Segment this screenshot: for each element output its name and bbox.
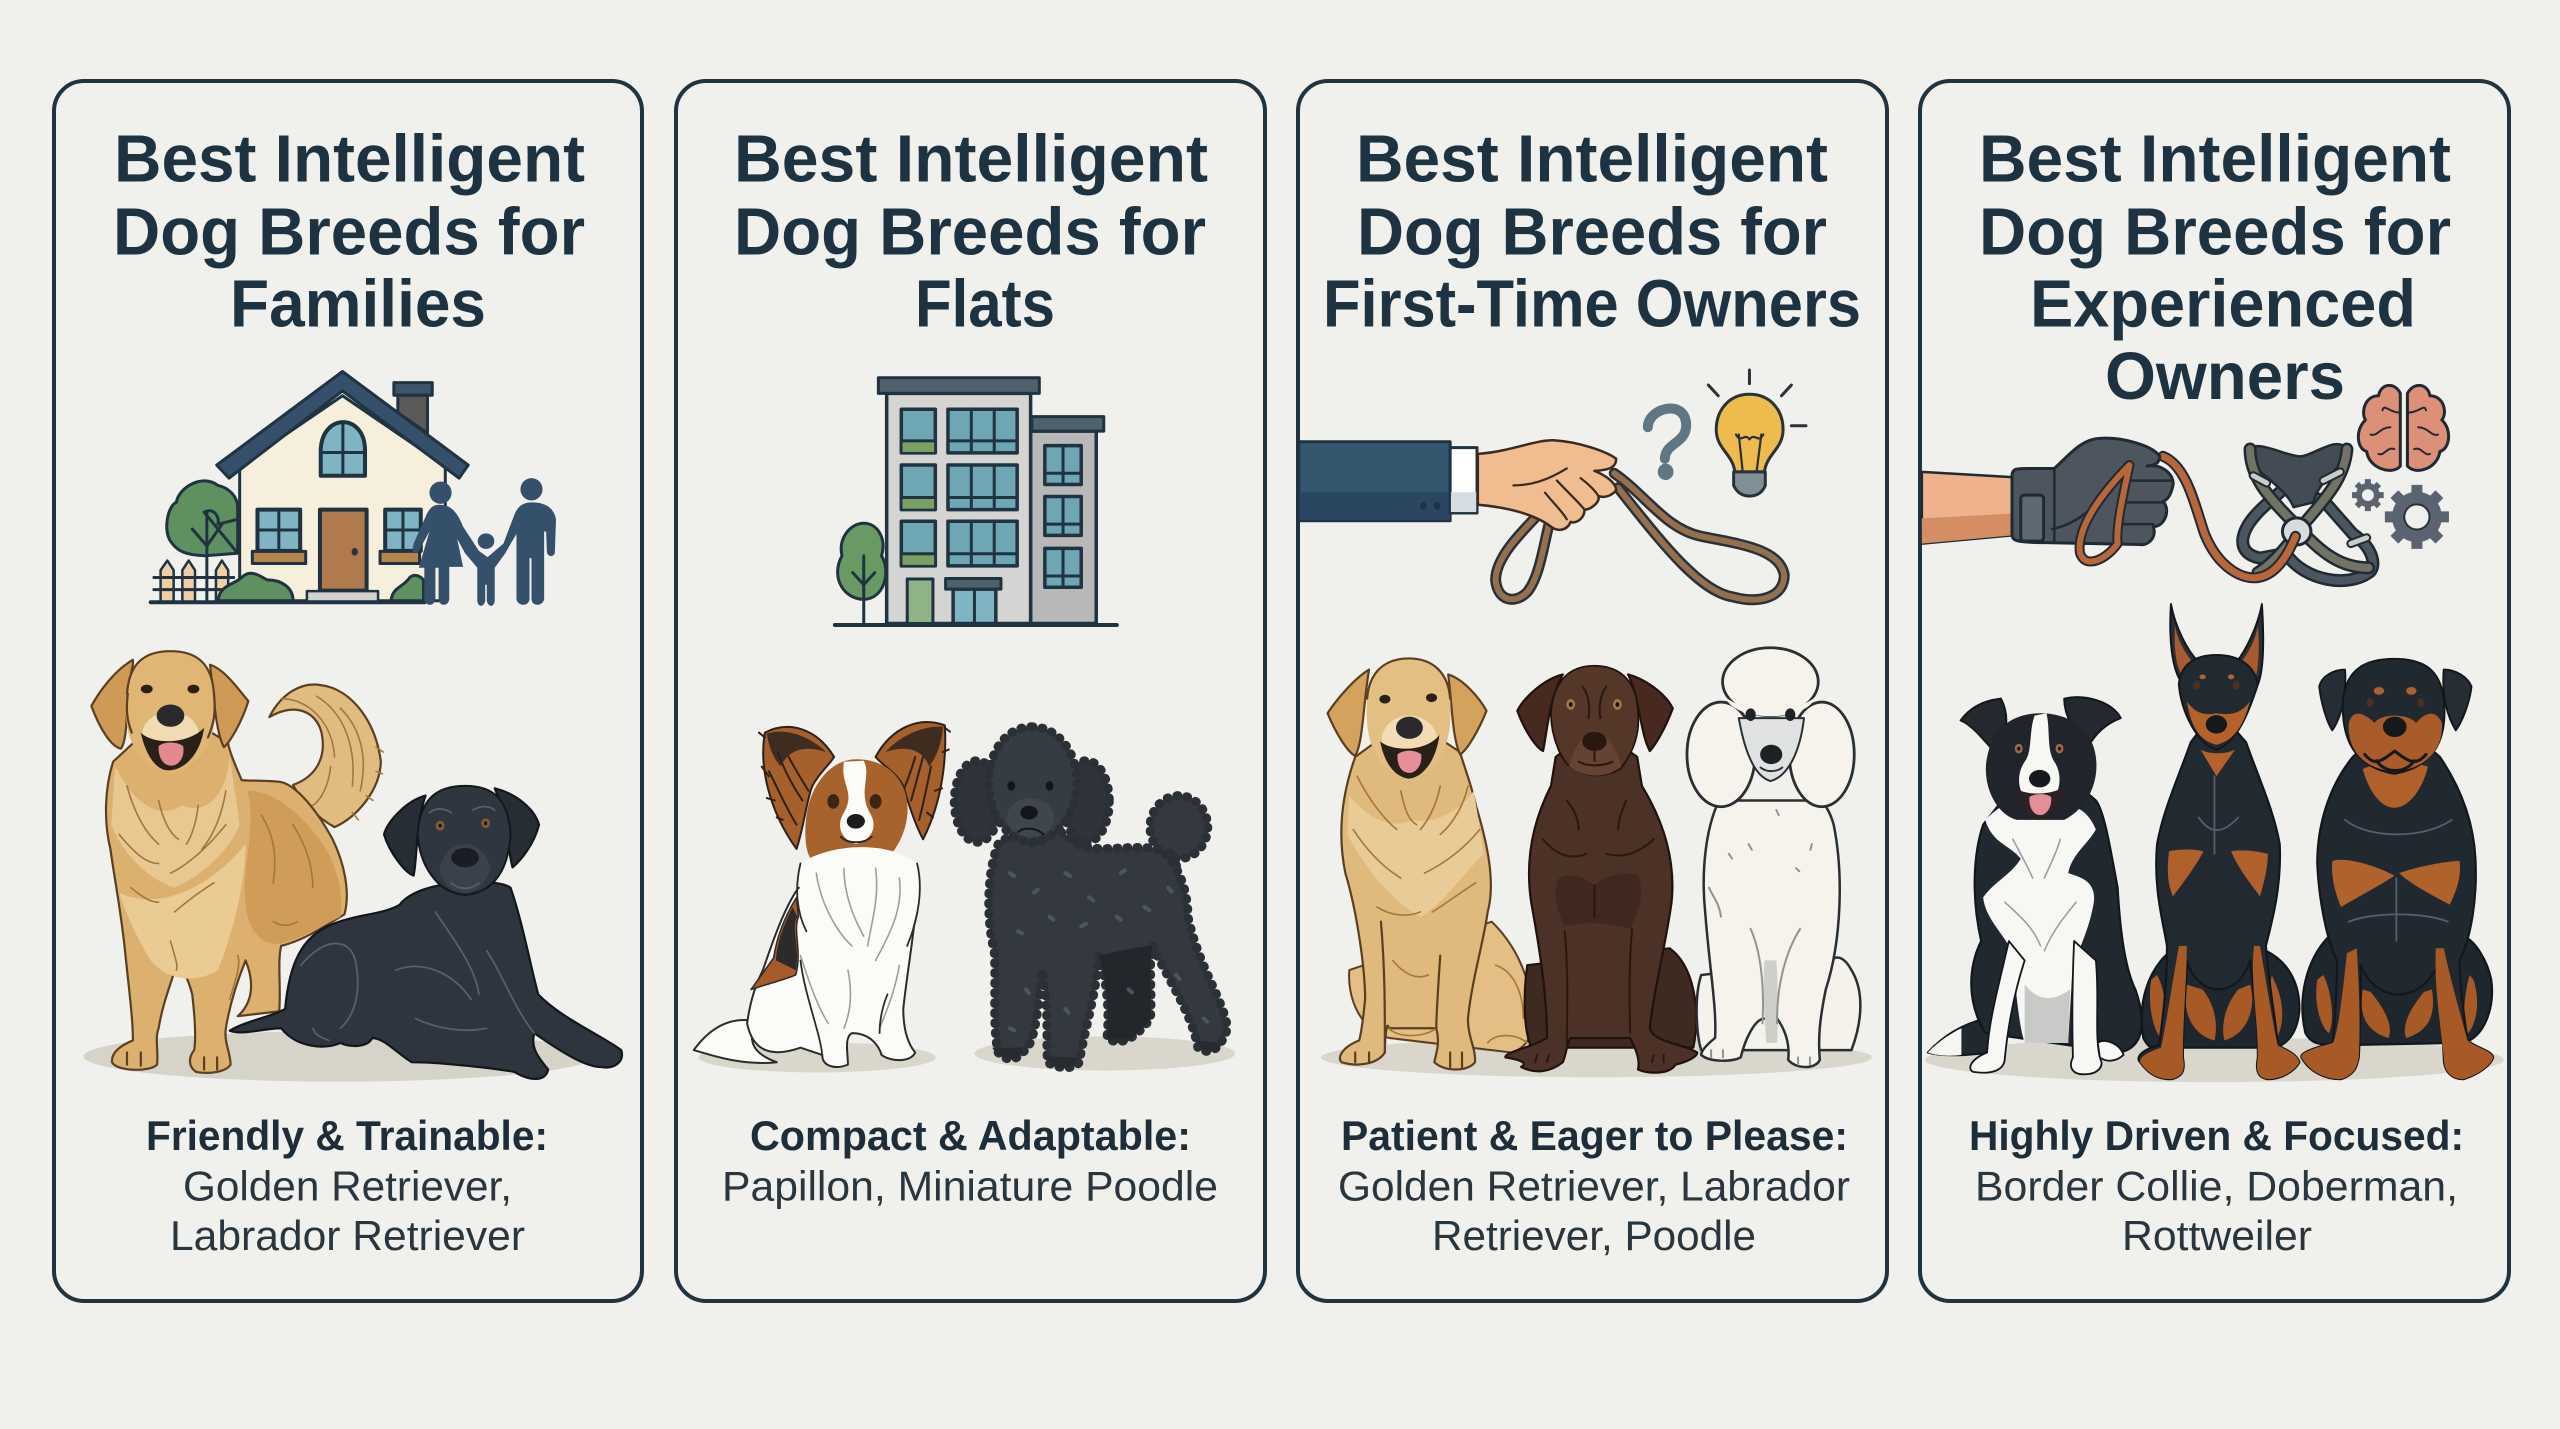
heading: first-time owners: Best Intelligent <box>1356 122 1828 197</box>
ground shadow <box>1321 1037 1872 1077</box>
text: flat breeds <box>722 1112 1218 1210</box>
heading: families: Dog Breeds for <box>113 194 585 269</box>
icon: hand holding leash <box>1299 440 1784 600</box>
dog: papillon <box>694 722 950 1067</box>
text: first-time breeds: Golden Retriever, Labrador <box>1338 1163 1850 1210</box>
heading: families <box>113 122 585 342</box>
card frame <box>676 81 1265 1301</box>
heading: flats <box>734 122 1208 342</box>
panel: experienced owners <box>1920 81 2509 1301</box>
illustration: experienced art <box>1922 385 2504 1082</box>
heading: experienced owners: Dog Breeds for <box>1979 194 2451 269</box>
heading: experienced owners: Best Intelligent <box>1979 122 2451 197</box>
dog: border collie <box>1928 697 2142 1074</box>
icon: apartment building <box>835 378 1117 625</box>
dog: white standard poodle sitting <box>1687 648 1860 1067</box>
heading: families: Families <box>230 267 486 342</box>
dog: miniature poodle <box>954 727 1228 1068</box>
dog: rottweiler <box>2301 659 2493 1079</box>
heading: first-time owners: Dog Breeds for <box>1357 194 1827 269</box>
dog: black labrador lying <box>230 786 622 1079</box>
panel: flats <box>676 81 1265 1301</box>
icon: question mark <box>1648 408 1686 480</box>
text: first-time breeds: Retriever, Poodle <box>1432 1212 1756 1259</box>
text: first-time breeds: Patient & Eager to Please: <box>1341 1112 1848 1159</box>
text: family breeds <box>146 1112 548 1259</box>
ground shadow <box>83 1031 594 1082</box>
text: experienced breeds: Rottweiler <box>2122 1212 2312 1259</box>
panel: families <box>54 81 642 1301</box>
dog: chocolate labrador sitting <box>1505 666 1697 1073</box>
illustration: first-time art <box>1299 370 1872 1077</box>
icon: brain <box>2358 385 2449 470</box>
heading: flats: Best Intelligent <box>734 122 1208 197</box>
card frame <box>1298 81 1887 1301</box>
heading: families: Best Intelligent <box>114 122 585 197</box>
text: flat breeds: Compact & Adaptable: <box>750 1112 1191 1159</box>
heading: first-time owners: First-Time Owners <box>1323 267 1861 342</box>
heading: flats: Dog Breeds for <box>734 194 1206 269</box>
heading: experienced owners <box>1979 122 2451 414</box>
icon: house and family <box>151 372 556 606</box>
ground shadow <box>1925 1037 2504 1082</box>
dog: doberman <box>2139 604 2299 1079</box>
icon: light bulb <box>1708 370 1806 496</box>
heading: experienced owners: Experienced <box>2030 267 2416 342</box>
text: flat breeds: Papillon, Miniature Poodle <box>722 1163 1218 1210</box>
panel: first-time owners <box>1298 81 1887 1301</box>
icon: gloved hand with leash and harness <box>1922 438 2373 581</box>
heading: first-time owners <box>1323 122 1861 342</box>
card frame <box>1920 81 2509 1301</box>
dog: golden retriever standing <box>91 651 383 1073</box>
text: experienced breeds <box>1969 1112 2464 1259</box>
text: experienced breeds: Highly Driven & Focused: <box>1969 1112 2464 1159</box>
text: family breeds: Golden Retriever, <box>183 1163 512 1210</box>
text: first-time breeds <box>1338 1112 1850 1259</box>
dog: golden retriever sitting <box>1328 658 1533 1069</box>
heading: experienced owners: Owners <box>2105 339 2345 414</box>
illustration: families art <box>83 372 622 1082</box>
icon: gears <box>2352 479 2449 549</box>
heading: flats: Flats <box>915 267 1055 342</box>
ground shadows <box>698 1037 1235 1072</box>
text: family breeds: Labrador Retriever <box>170 1212 525 1259</box>
illustration: flats art <box>694 378 1235 1072</box>
text: family breeds: Friendly & Trainable: <box>146 1112 548 1159</box>
card frame <box>54 81 642 1301</box>
text: experienced breeds: Border Collie, Doberman, <box>1975 1163 2458 1210</box>
